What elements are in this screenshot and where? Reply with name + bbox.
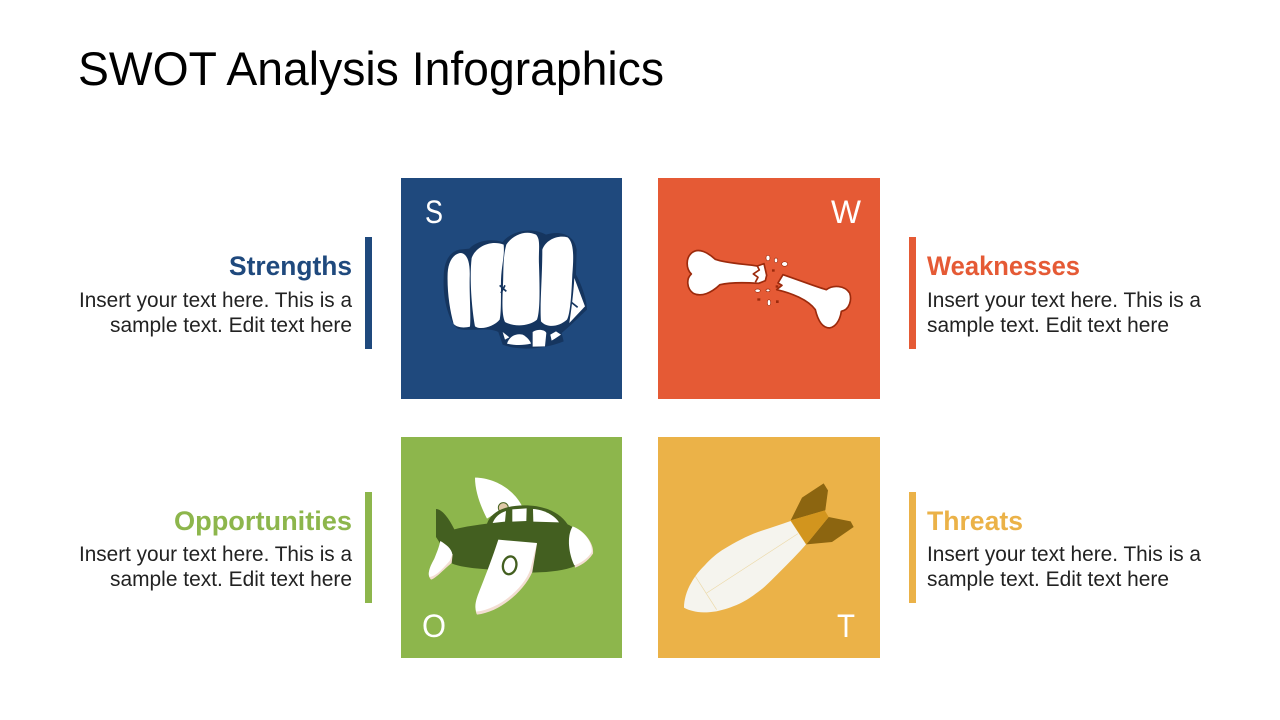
panel: S square xyxy=(401,178,622,399)
text block: strengths: Insert your text here. This is a xyxy=(79,289,352,312)
accent bar: strengths xyxy=(365,237,372,349)
panel: opportunities text xyxy=(79,492,372,603)
rear wing xyxy=(475,478,522,519)
heading: threats: Threats xyxy=(927,506,1023,536)
panel: O square xyxy=(401,437,622,658)
fuselage xyxy=(436,505,589,573)
letter W: W xyxy=(831,194,862,230)
finger 3 xyxy=(502,233,540,325)
panel: weaknesses text xyxy=(909,237,1201,349)
letter O: O xyxy=(422,608,446,644)
panel: strengths text xyxy=(79,237,372,349)
title: SWOT Analysis Infographics xyxy=(78,42,664,95)
tail fin xyxy=(429,541,452,577)
main wing xyxy=(475,540,537,612)
text block: opportunities: sample text. Edit text here xyxy=(110,568,352,591)
upper fin xyxy=(791,483,828,520)
heading: opportunities: Opportunities xyxy=(174,506,352,536)
heading: weaknesses: Weaknesses xyxy=(927,251,1080,281)
panel: W square xyxy=(658,178,880,399)
accent bar: opportunities xyxy=(365,492,372,603)
knuckle ticks xyxy=(500,285,578,307)
icon: broken bone xyxy=(687,250,851,328)
heading: strengths: Strengths xyxy=(229,251,352,281)
text block: opportunities: Insert your text here. This is a xyxy=(79,543,352,566)
text block: strengths: sample text. Edit text here xyxy=(110,314,352,337)
text block: weaknesses: sample text. Edit text here xyxy=(927,314,1169,337)
icon: bomb xyxy=(684,483,854,612)
finger 2 xyxy=(471,243,504,328)
bone left piece xyxy=(687,250,767,295)
main wing shadow xyxy=(476,542,537,615)
text block: weaknesses xyxy=(927,289,1201,337)
icon: airplane xyxy=(429,478,593,615)
bomb body xyxy=(684,521,806,612)
thumb side xyxy=(569,278,585,323)
icon: fist xyxy=(444,230,587,349)
body seams xyxy=(695,534,798,610)
text block: strengths xyxy=(79,289,352,337)
panel: T square xyxy=(658,437,880,658)
bone left break line xyxy=(753,266,759,282)
wing porthole xyxy=(501,555,518,576)
text block: threats xyxy=(927,543,1201,591)
tail collar xyxy=(791,510,829,544)
lower fin xyxy=(806,517,854,544)
cockpit windows xyxy=(493,508,559,523)
accent bar: threats xyxy=(909,492,916,603)
pilot head xyxy=(498,503,508,513)
tail fin shadow xyxy=(429,543,453,580)
text block: opportunities xyxy=(79,543,352,591)
bone fragments xyxy=(755,255,788,306)
thumb xyxy=(507,334,531,345)
nose shadow xyxy=(573,527,593,568)
text block: weaknesses: Insert your text here. This is a xyxy=(927,289,1201,312)
finger 4 xyxy=(541,237,573,326)
letter S: S xyxy=(425,194,443,230)
nose xyxy=(569,526,592,565)
letter T: T xyxy=(837,608,855,644)
bone right piece xyxy=(777,275,851,328)
text block: threats: Insert your text here. This is a xyxy=(927,543,1201,566)
finger 1 xyxy=(448,253,470,327)
panel: threats text xyxy=(909,492,1201,603)
accent bar: weaknesses xyxy=(909,237,916,349)
text block: threats: sample text. Edit text here xyxy=(927,568,1169,591)
